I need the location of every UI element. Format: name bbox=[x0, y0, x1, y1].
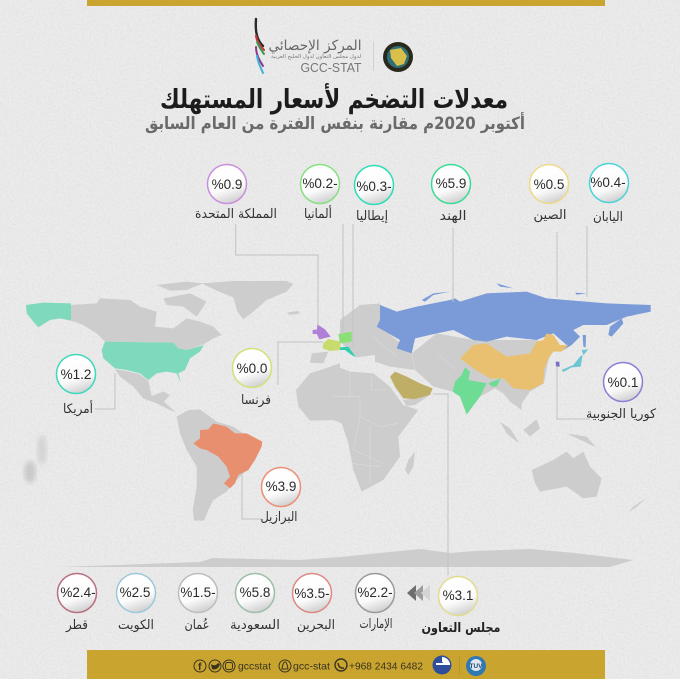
icon: whatsapp bbox=[335, 659, 347, 671]
logo header bbox=[256, 19, 413, 75]
callout: Japan bbox=[590, 164, 628, 225]
callout: Italy: إيطاليا bbox=[356, 209, 388, 224]
icon: facebook bbox=[194, 660, 206, 673]
South America bbox=[177, 409, 253, 521]
callout: UK: المملكة المتحدة bbox=[195, 207, 277, 222]
icon: twitter bbox=[209, 660, 221, 672]
subtitle: أكتوبر 2020م مقارنة بنفس الفترة من العام السابق bbox=[145, 112, 525, 134]
callout: UK: %0.9 bbox=[212, 177, 242, 192]
Korea bbox=[556, 362, 560, 367]
callout: UK bbox=[195, 164, 277, 222]
callout: Germany: ألمانيا bbox=[304, 205, 332, 222]
title: معدلات التضخم لأسعار المستهلك bbox=[160, 83, 508, 115]
New Zealand bbox=[628, 498, 647, 513]
callout: France: فرنسا bbox=[241, 393, 271, 408]
world map bbox=[26, 281, 651, 567]
callout: Saudi Arabia bbox=[230, 574, 280, 633]
Arctic islands bbox=[157, 282, 207, 317]
Arabia south bbox=[390, 380, 430, 406]
callout: Kuwait: الكويت bbox=[118, 618, 154, 633]
callout: GCC bbox=[422, 576, 500, 636]
India bbox=[453, 367, 501, 415]
Antarctica bbox=[60, 549, 633, 567]
Brazil bbox=[193, 423, 262, 488]
text: gcc-stat: gcc-stat bbox=[293, 660, 330, 672]
map: eastern hemisphere bbox=[333, 283, 651, 513]
callout: USA bbox=[56, 354, 96, 417]
callout: Bahrain bbox=[292, 574, 335, 633]
Russia bbox=[377, 292, 651, 353]
callout: Bahrain: %3.5- bbox=[294, 586, 330, 601]
callout: Oman: عُمان bbox=[184, 617, 210, 633]
Australia bbox=[532, 452, 602, 498]
Eurasia base bbox=[340, 303, 553, 410]
top gold bar bbox=[87, 0, 605, 6]
icon: instagram bbox=[223, 660, 235, 672]
callout: Japan: %0.4- bbox=[590, 175, 626, 190]
Japan bbox=[562, 349, 588, 372]
callout: Italy bbox=[354, 166, 394, 224]
callout: Brazil bbox=[260, 468, 300, 525]
Madagascar bbox=[405, 452, 415, 475]
callout: South Korea bbox=[586, 362, 657, 422]
callout: Oman bbox=[178, 574, 218, 633]
USA bbox=[102, 342, 204, 383]
callout: Kuwait: %2.5 bbox=[120, 585, 150, 600]
Africa east bbox=[333, 365, 418, 492]
callout: Japan: اليابان bbox=[593, 210, 623, 225]
callout: Qatar: قطر bbox=[65, 618, 88, 633]
callout: USA: %1.2 bbox=[61, 367, 91, 382]
callout: Brazil: %3.9 bbox=[266, 479, 296, 494]
callout: South Korea: %0.1 bbox=[608, 375, 638, 390]
leader lines bbox=[95, 224, 590, 575]
Canada bbox=[71, 298, 222, 350]
callout: GCC: مجلس التعاون bbox=[422, 621, 500, 636]
callout: Oman: %1.5- bbox=[180, 585, 216, 600]
country borders bbox=[333, 337, 457, 483]
text: centre name: المركز الإحصائي bbox=[268, 38, 362, 54]
Mexico and Central America bbox=[115, 369, 176, 413]
UK bbox=[313, 324, 331, 339]
callout: China bbox=[530, 164, 568, 223]
callout: South Korea: كوريا الجنوبية bbox=[586, 407, 657, 422]
France bbox=[323, 339, 340, 351]
callout: Qatar: %2.4- bbox=[60, 585, 96, 600]
text: centre subtitle: لدول مجلس التعاون لدول الخليج العربية bbox=[271, 54, 362, 60]
callout: India: الهند bbox=[440, 209, 466, 224]
callout: Saudi Arabia: %5.8 bbox=[240, 585, 270, 600]
text: gccstat: gccstat bbox=[238, 660, 271, 672]
icon: snapchat bbox=[279, 660, 291, 672]
icon: TUV badge bbox=[466, 656, 486, 676]
Greenland bbox=[202, 281, 293, 319]
callout: China: %0.5 bbox=[534, 177, 564, 192]
callout: Saudi Arabia: السعودية bbox=[230, 618, 280, 633]
Southeast Asia islands bbox=[500, 419, 596, 447]
arrows toward GCC bbox=[407, 585, 430, 601]
Africa west bbox=[296, 363, 340, 421]
Germany bbox=[338, 332, 352, 343]
callout: Qatar bbox=[58, 574, 96, 633]
callout: UAE bbox=[356, 574, 394, 632]
callout: Bahrain: البحرين bbox=[297, 618, 335, 633]
callout: France bbox=[232, 348, 272, 408]
callout: Brazil: البرازيل bbox=[260, 510, 298, 525]
callout: Germany: %0.2- bbox=[302, 176, 338, 191]
Russia islands bbox=[422, 283, 623, 347]
callout: GCC: %3.1 bbox=[443, 588, 473, 603]
icon: certification logo bbox=[432, 656, 452, 674]
callout: Italy: %0.3- bbox=[356, 179, 392, 194]
icon: GCC emblem bbox=[383, 42, 413, 72]
map: western hemisphere bbox=[26, 281, 340, 521]
icon: ribbon mark bbox=[256, 19, 264, 73]
callout: Kuwait bbox=[116, 574, 156, 633]
callout: India: %5.9 bbox=[436, 176, 466, 191]
callout: India bbox=[432, 164, 470, 224]
text: phone: +968 2434 6482 bbox=[349, 660, 423, 672]
callout: China: الصين bbox=[534, 208, 566, 223]
Italy bbox=[340, 347, 356, 357]
icon: TUV badge: TUV bbox=[470, 663, 483, 670]
callout: Germany bbox=[300, 164, 340, 222]
callout: USA: أمريكا bbox=[63, 400, 93, 417]
text: GCC-STAT: GCC-STAT bbox=[300, 60, 362, 75]
callout: France: %0.0 bbox=[237, 361, 267, 376]
callout: UAE: الإمارات bbox=[360, 617, 392, 632]
Iberia bbox=[310, 352, 328, 363]
Saudi Arabia bbox=[390, 372, 433, 399]
Alaska bbox=[26, 303, 71, 327]
icon: facebook: f bbox=[198, 661, 202, 673]
China bbox=[460, 333, 568, 390]
footer bar bbox=[87, 650, 605, 679]
callout: UAE: %2.2- bbox=[357, 585, 393, 600]
